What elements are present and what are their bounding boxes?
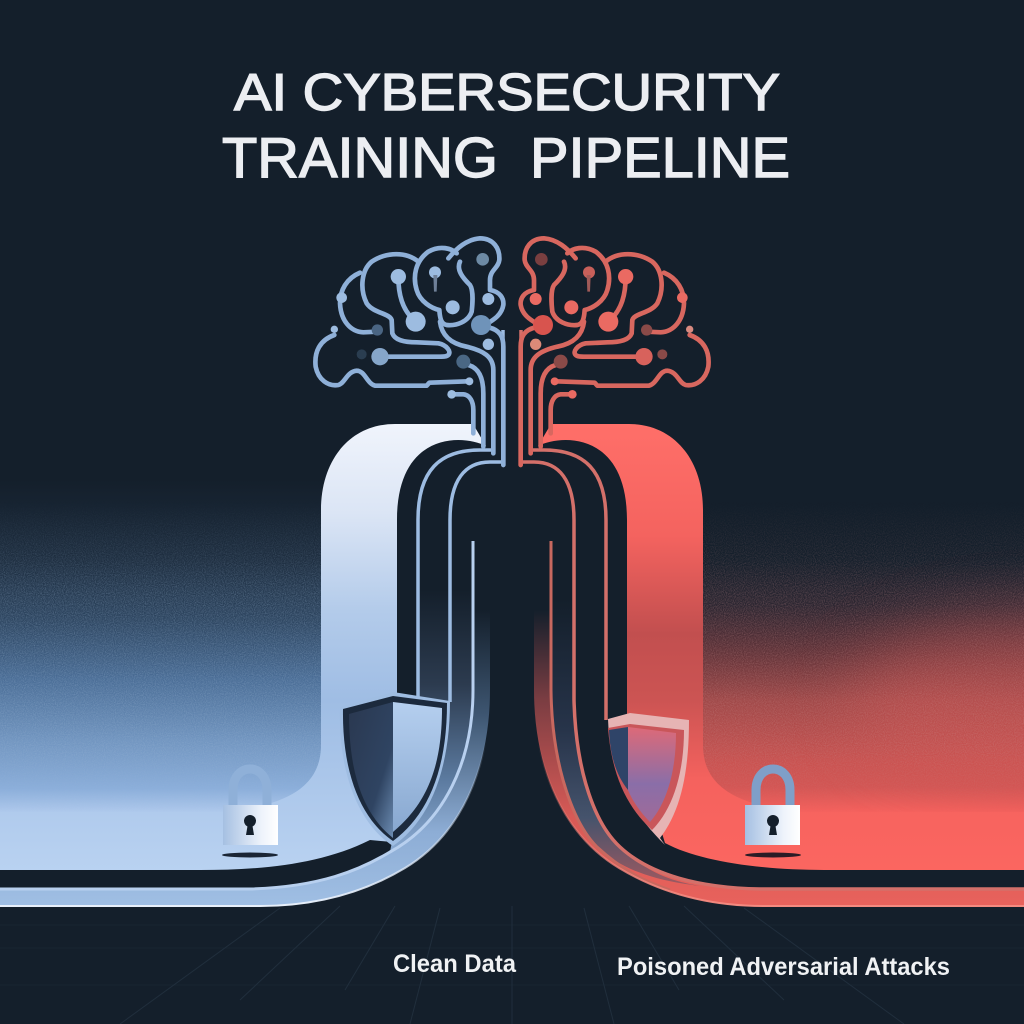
label: poisoned adversarial attacks: Poisoned Adversarial Attacks (617, 953, 950, 981)
clean pipeline: thin lines (0, 330, 503, 906)
panel: poisoned data gradient field (702, 560, 1024, 820)
clean pipeline: lower channel (0, 590, 490, 906)
clean pipeline: main band (0, 424, 486, 870)
poisoned pipeline: lower channel (534, 600, 1024, 906)
panel: clean data gradient field (0, 480, 322, 820)
icon: red shield (608, 713, 689, 845)
icon: blue padlock (222, 769, 278, 858)
panel grain (0, 514, 1024, 784)
title: AI CYBERSECURITY (234, 64, 780, 122)
poisoned pipeline: thin lines (521, 330, 1024, 906)
icon: red side padlock (745, 769, 801, 858)
poisoned pipeline: main band (538, 424, 1024, 870)
icon: blue brain circuit (315, 238, 503, 465)
title: TRAINING PIPELINE (222, 126, 790, 190)
icon: red brain circuit (521, 238, 709, 465)
floor grid (0, 906, 1024, 1024)
icon: blue shield (340, 692, 450, 846)
label: clean data: Clean Data (393, 950, 517, 978)
title (222, 64, 790, 190)
